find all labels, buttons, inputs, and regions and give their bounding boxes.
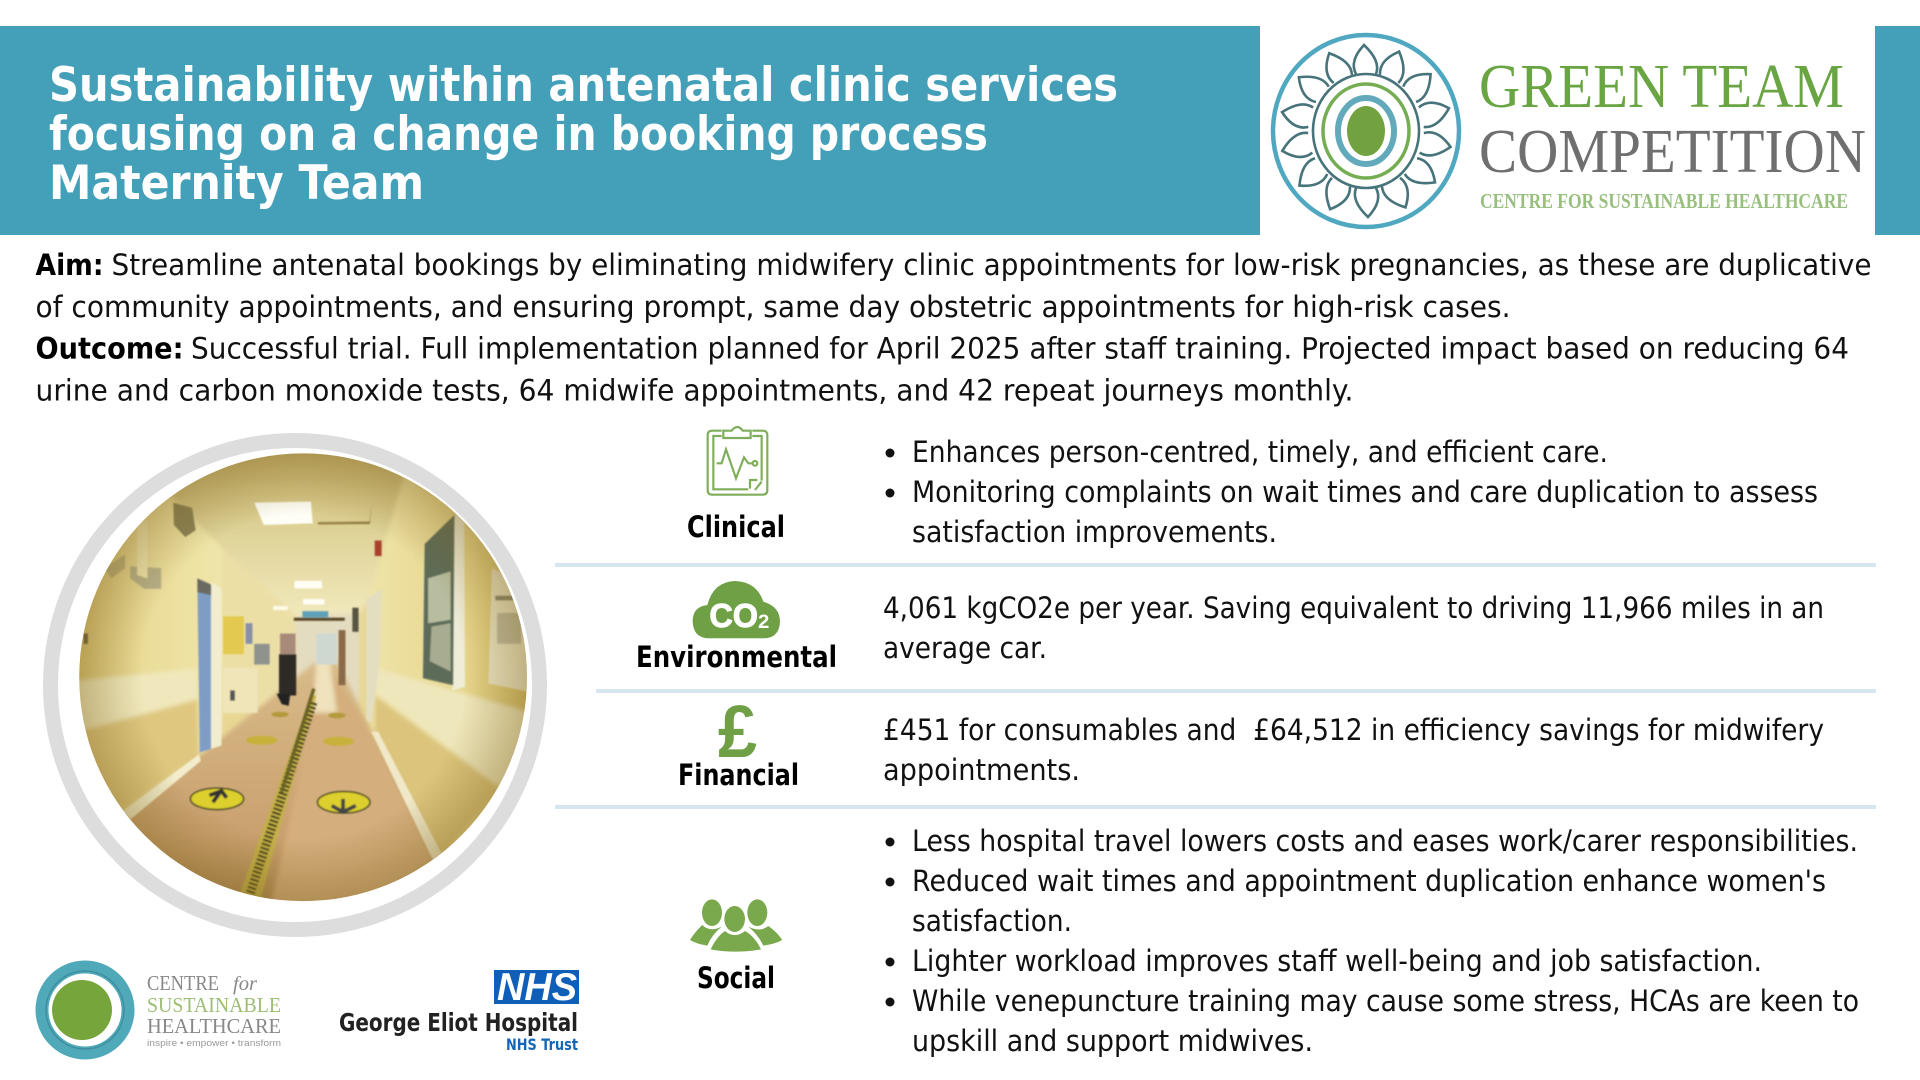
- label: Clinical: Clinical: [687, 510, 785, 544]
- wordmark: SUSTAINABLE: [147, 993, 281, 1017]
- text: financial saving: £451 for consumables and £64,512 in efficiency savings for midwifery: [883, 713, 1824, 747]
- text block: aim and outcome: Outcome:: [36, 332, 184, 366]
- wordmark: [147, 971, 281, 1048]
- wordmark: CENTRE: [147, 971, 219, 995]
- text: environmental saving: 4,061 kgCO2e per year. Saving equivalent to driving 11,966 miles in an: [883, 591, 1824, 625]
- text: environmental saving: average car.: [883, 631, 1047, 665]
- row: environmental: [636, 581, 1824, 674]
- icon: pound sign: £: [718, 690, 757, 773]
- wordmark: GREEN TEAM: [1479, 53, 1844, 121]
- icon: CO2 cloud: [693, 581, 780, 638]
- text block: aim and outcome: Streamline antenatal bookings by eliminating midwifery clinic appointments for low-risk pregnancies, as these are duplicative: [112, 248, 1872, 282]
- logo: NHS George Eliot Hospital: NHS: [497, 966, 577, 1009]
- logo: Green Team Competition: [1273, 35, 1866, 227]
- wordmark: HEALTHCARE: [147, 1014, 281, 1038]
- bullet list: social: satisfaction.: [912, 904, 1072, 938]
- header banner: [0, 26, 1920, 235]
- logo: Centre for Sustainable Healthcare: [42, 967, 281, 1053]
- icon: green circle with teal ring: [42, 967, 128, 1053]
- logo: NHS George Eliot Hospital: NHS Trust: [506, 1035, 578, 1054]
- bullet list: clinical: [886, 435, 1818, 549]
- title: [49, 58, 1118, 211]
- icon: sunburst emblem: [1273, 35, 1459, 227]
- row: social: [690, 824, 1859, 1058]
- title: Maternity Team: [49, 156, 424, 211]
- wordmark: COMPETITION: [1479, 118, 1866, 186]
- bullet list: social: Lighter workload improves staff well-being and job satisfaction.: [912, 944, 1762, 978]
- row: clinical: [687, 427, 1818, 549]
- icon: CO2 cloud: CO: [709, 598, 758, 635]
- text block: aim and outcome: Successful trial. Full implementation planned for April 2025 after staff training. Projected impact based on reducing 64: [191, 332, 1849, 366]
- text block: aim and outcome: urine and carbon monoxide tests, 64 midwife appointments, and 42 repeat journeys monthly.: [36, 374, 1354, 408]
- label: Financial: Financial: [678, 758, 799, 792]
- wordmark: for: [233, 973, 257, 995]
- wordmark: inspire • empower • transform: [147, 1038, 281, 1048]
- logo: NHS George Eliot Hospital: [339, 966, 579, 1054]
- photo: hospital corridor in circular frame: [50, 440, 543, 930]
- bullet list: clinical: Enhances person-centred, timely, and efficient care.: [912, 435, 1608, 469]
- text: financial saving: appointments.: [883, 753, 1080, 787]
- bullet list: social: [886, 824, 1859, 1058]
- bullet list: social: Reduced wait times and appointment duplication enhance women's: [912, 864, 1826, 898]
- text: environmental saving: [883, 591, 1824, 665]
- icon: clipboard with pulse: [708, 427, 767, 495]
- bullet list: social: Less hospital travel lowers costs and eases work/carer responsibilities.: [912, 824, 1858, 858]
- row: financial: [678, 690, 1824, 792]
- wordmark: CENTRE FOR SUSTAINABLE HEALTHCARE: [1480, 189, 1848, 213]
- logo: NHS George Eliot Hospital: George Eliot Hospital: [339, 1008, 578, 1037]
- label: Social: Social: [697, 961, 775, 995]
- label: Environmental: Environmental: [636, 640, 837, 674]
- text block: aim and outcome: of community appointments, and ensuring prompt, same day obstetric appointments for high-risk cases.: [36, 290, 1510, 324]
- title: Sustainability within antenatal clinic services: [49, 58, 1118, 113]
- wordmark: [1479, 53, 1866, 213]
- text: financial saving: [883, 713, 1824, 787]
- bullet list: social: upskill and support midwives.: [912, 1024, 1313, 1058]
- text block: aim and outcome: [36, 248, 1872, 408]
- bullet list: clinical: satisfaction improvements.: [912, 515, 1277, 549]
- bullet list: social: While venepuncture training may cause some stress, HCAs are keen to: [912, 984, 1859, 1018]
- title: focusing on a change in booking process: [49, 107, 988, 162]
- icon: three people: [690, 899, 782, 952]
- bullet list: clinical: Monitoring complaints on wait times and care duplication to assess: [912, 475, 1818, 509]
- text block: aim and outcome: Aim:: [36, 248, 104, 282]
- icon: CO2 cloud: 2: [758, 612, 769, 633]
